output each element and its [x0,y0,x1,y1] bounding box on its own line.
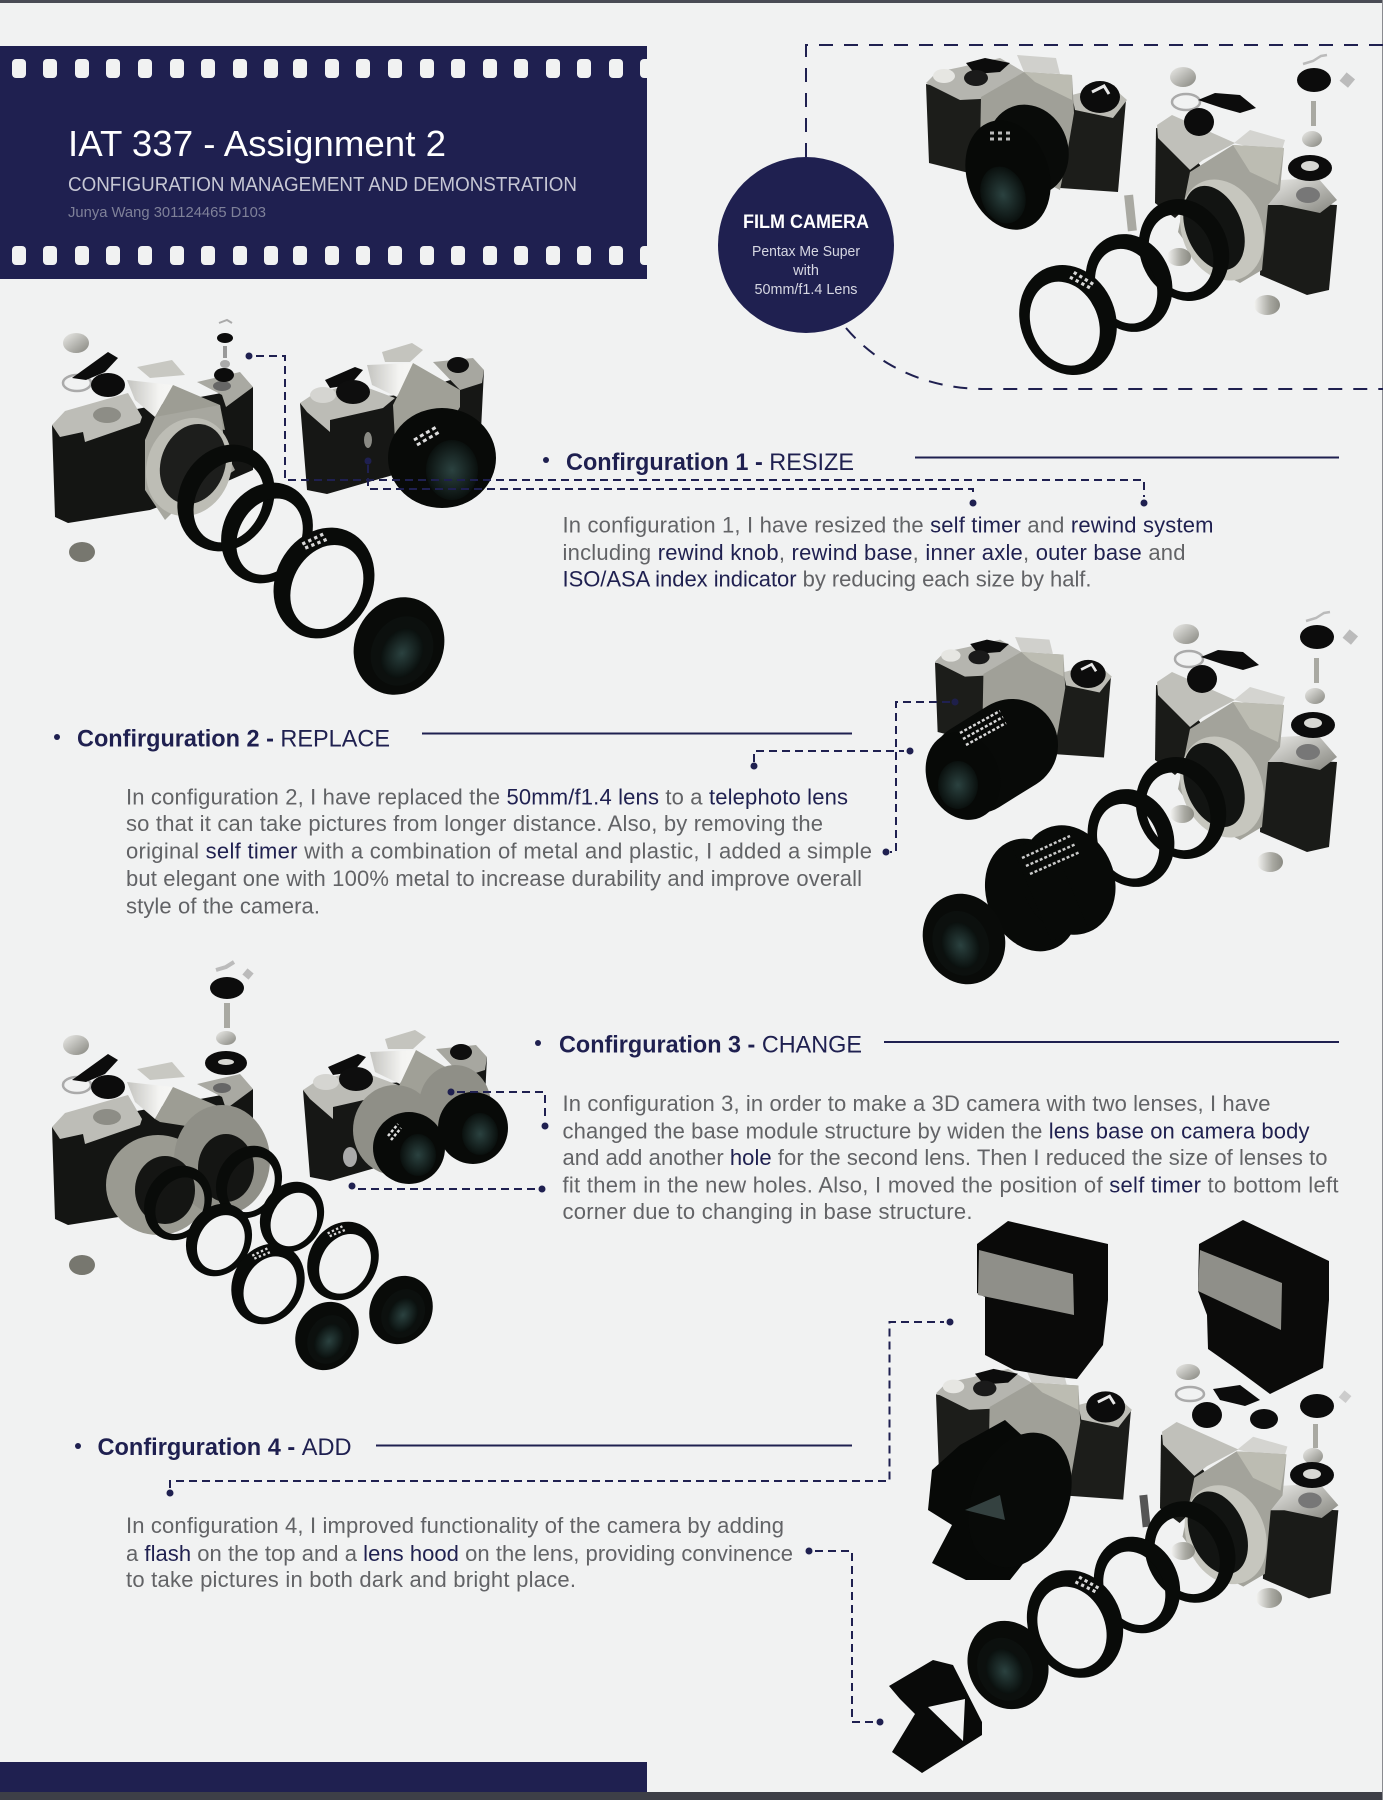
subtitle: CONFIGURATION MANAGEMENT AND DEMONSTRATION [68,174,577,196]
heading: configuration 4: Confirguration 4 - ADD [98,1434,352,1461]
heading: configuration 3 [535,1032,1339,1058]
camera: assembled, config 2 [913,637,1112,831]
text: configuration 3: and add another hole for the second lens. Then I reduced the size of lenses to [562,1145,1328,1170]
text: configuration 1: In configuration 1, I have resized the self timer and rewind system [562,512,1214,538]
text: configuration 1: ISO/ASA index indicator by reducing each size by half. [562,566,1092,592]
leader: config 4 lens hood [806,1548,884,1726]
circle: film camera: Pentax Me Super [752,244,860,260]
circle: film camera: FILM CAMERA [743,212,869,233]
text: configuration 3: corner due to changing in base structure. [562,1199,972,1224]
circle: film camera [718,157,894,333]
circle: film camera: with [792,263,819,279]
heading: configuration 3: Confirguration 3 - CHANGE [559,1032,862,1058]
title: IAT 337 - Assignment 2 [68,123,446,164]
flash unit [977,1221,1108,1379]
text: configuration 3: fit them in the new holes. Also, I moved the position of self timer to bottom left [562,1172,1338,1198]
leader: config 2 telephoto lens [750,748,914,770]
camera: exploded, config 3 [52,962,445,1381]
circle: film camera: 50mm/f1.4 Lens [754,282,858,298]
heading: configuration 1: Confirguration 1 - RESIZE [566,449,854,476]
camera: assembled with flash, config 4 [928,1221,1132,1583]
camera: exploded, original [1003,55,1355,390]
leader: config 1 rewind [364,458,976,506]
camera: assembled, config 3 [303,1030,508,1184]
text: configuration 3 [562,1091,1338,1224]
sprocket holes [12,59,647,265]
leader: config 3 self timer [348,1182,546,1192]
lens hood [889,1660,982,1773]
camera: exploded with flash, config 4 [889,1220,1351,1773]
text: configuration 4: In configuration 4, I improved functionality of the camera by adding [126,1513,784,1538]
camera: exploded, config 2 [909,612,1358,997]
text: configuration 3: In configuration 3, in order to make a 3D camera with two lenses, I have [562,1091,1270,1116]
dashed curve from circle [846,328,1383,389]
text: configuration 4 [126,1513,793,1592]
footer bar [0,1762,647,1792]
heading: configuration 2: Confirguration 2 - REPLACE [77,726,390,752]
author line: Junya Wang 301124465 D103 [68,204,266,221]
text: configuration 1 [562,512,1214,592]
heading: configuration 4 [75,1434,852,1461]
camera: assembled, config 1 [300,343,496,508]
title banner film strip [0,46,647,279]
text: configuration 1: including rewind knob, rewind base, inner axle, outer base and [562,540,1186,565]
text: configuration 2: but elegant one with 100% metal to increase durability and improve overall [126,866,862,891]
heading: configuration 1 [543,449,1339,476]
text: configuration 2: style of the camera. [126,894,320,918]
text: configuration 2 [126,784,872,918]
leader: config 4 flash [166,1318,954,1496]
text: configuration 3: changed the base module structure by widen the lens base on camera body [562,1118,1310,1144]
leader: config 3 lens base [448,1088,548,1130]
heading: configuration 2 [54,726,852,752]
leader: config 2 self timer [882,698,958,856]
camera: assembled, original [926,55,1127,241]
flash unit [1198,1220,1329,1394]
text: configuration 4: a flash on the top and a lens hood on the lens, providing convinence [126,1541,793,1566]
dashed frame from circle [806,45,1383,157]
leader: config 1 self timer [246,352,1148,506]
text: configuration 2: In configuration 2, I have replaced the 50mm/f1.4 lens to a telephoto lens [126,784,848,810]
text: configuration 2: original self timer with a combination of metal and plastic, I added a simple [126,838,872,864]
camera: exploded, config 1 [52,320,461,711]
text: configuration 2: so that it can take pictures from longer distance. Also, by removing the [126,811,823,836]
text: configuration 4: to take pictures in both dark and bright place. [126,1567,576,1592]
